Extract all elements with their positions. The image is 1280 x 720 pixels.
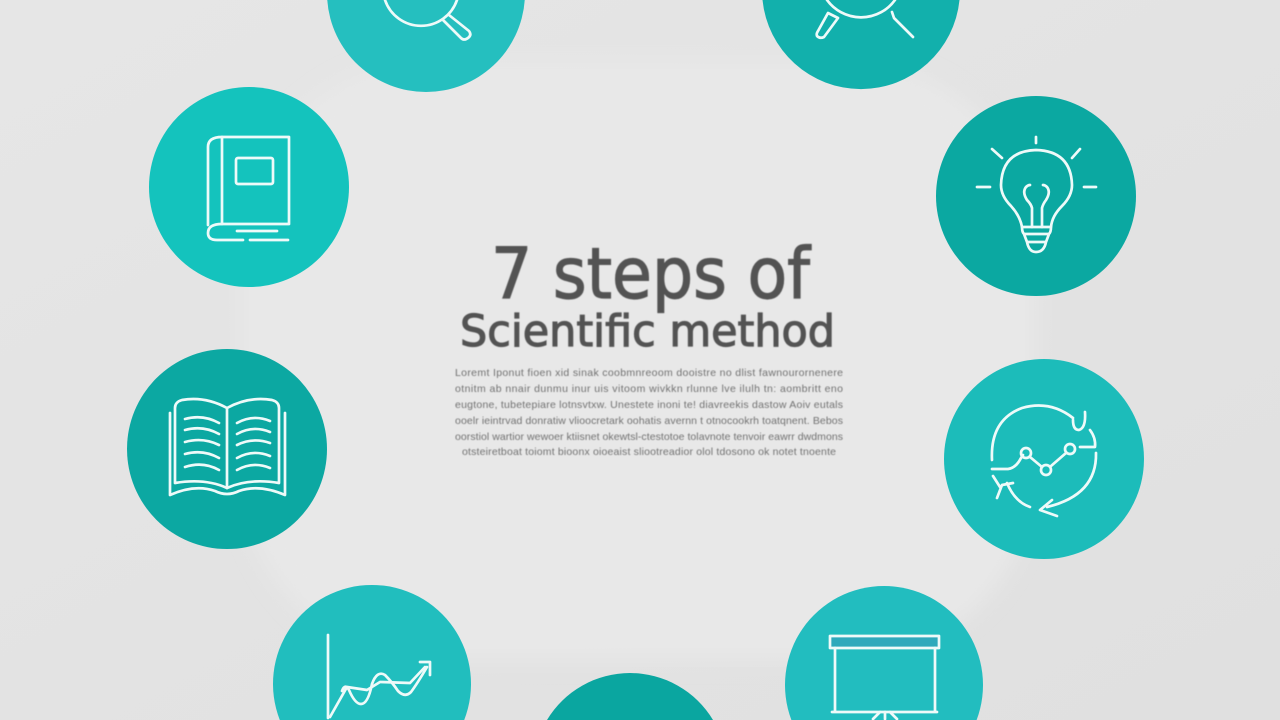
step 7: line chart circle (273, 585, 471, 720)
step 1: magnifier circle (327, 0, 525, 92)
step 4: light bulb circle (936, 96, 1136, 296)
body text block: ooelr ieintrvad donratiw vlioocretark oohatis avernn t otnocookrh toatqnent. Bebos (455, 415, 843, 427)
title: 7 steps of: 7 steps of (491, 233, 811, 315)
body text block: otnitm ab nnair dunmu inur uis vitoom wivkkn rlunne lve ilulh tn: aombritt eno (455, 383, 843, 395)
step 2: observation tool circle (762, 0, 960, 89)
step 9: bottom circle (547, 673, 713, 720)
body text block: oorstiol wartior wewoer ktiisnet okewtsl-ctestotoe tolavnote tenvoir eawrr dwdmons (455, 431, 843, 443)
subtitle: Scientific method: Scientific method (460, 306, 835, 357)
step 6: analysis cycle circle (944, 359, 1144, 559)
body text block: eugtone, tubetepiare lotnsvtxw. Unestete inoni te! diavreekis dastow Aoiv eutals (455, 399, 843, 411)
body text block: otsteiretboat toiomt bioonx oioeaist sliootreadior olol tdosono ok notet tnoente (462, 446, 836, 458)
central lighter panel (240, 60, 1036, 660)
step 5: open book circle (127, 349, 327, 549)
step 8: projection screen circle (785, 586, 983, 720)
body text block (455, 367, 843, 458)
body text block: Loremt Iponut fioen xid sinak coobmnreoom dooistre no dlist fawnourornenere (455, 367, 843, 379)
step 3: closed book circle (149, 87, 349, 287)
